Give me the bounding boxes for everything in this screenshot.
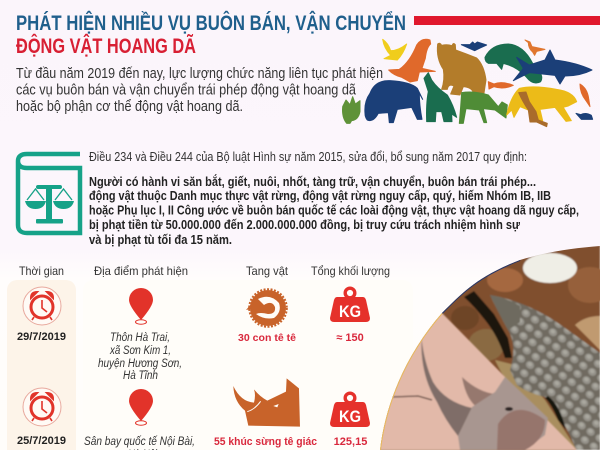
icon: weasel — [519, 92, 547, 127]
icon: turtle — [576, 113, 593, 119]
icon: alarm clock — [23, 287, 61, 325]
intro text — [16, 66, 383, 115]
icon: wolf — [424, 73, 457, 122]
animal silhouettes — [343, 39, 593, 127]
legal penalty text — [89, 174, 579, 247]
icon: bison — [365, 81, 423, 123]
icon: sea lion — [389, 39, 435, 82]
rhino photo — [380, 300, 577, 450]
title line 2: ĐỘNG VẬT HOANG DÃ — [16, 34, 196, 58]
legal penalty text: và bị phạt tù tối đa 15 năm. — [89, 232, 232, 247]
location: Thôn Hà Trai, — [110, 332, 170, 344]
intro text: hoặc bộ phận cơ thể động vật hoang dã. — [16, 99, 243, 115]
icon: leaping fish — [580, 84, 590, 107]
legal reference line: Điều 234 và Điều 244 của Bộ luật Hình sự năm 2015, sửa đổi, bổ sung năm 2017 quy định: — [89, 150, 527, 164]
seized goods: 30 con tê tê — [238, 332, 296, 344]
icon: map pin — [129, 389, 153, 425]
legal penalty text: bị phạt tiền từ 50.000.000 đến 2.000.000.000 đồng, bị truy cứu trách nhiệm hình sự — [89, 217, 520, 232]
intro text: các vụ buôn bán và vận chuyển trái phép động vật hoang dã — [16, 82, 357, 98]
red accent bar — [414, 16, 600, 25]
row 2 — [17, 378, 370, 450]
location — [98, 332, 182, 382]
panel: photo of pangolin and rhino — [380, 240, 600, 450]
intro text: Từ đầu năm 2019 đến nay, lực lượng chức năng liên tục phát hiện — [16, 66, 383, 82]
icon: KG weight: KG — [339, 302, 361, 321]
icon: bat — [461, 42, 487, 51]
location: Hà Tĩnh — [123, 370, 158, 382]
title — [16, 11, 406, 58]
icon: shark — [513, 50, 592, 84]
date: 29/7/2019 — [17, 331, 66, 343]
total weight: 125,15 — [334, 436, 367, 448]
icon: rhino head — [233, 378, 300, 427]
table headers: Tang vật — [246, 264, 289, 278]
location: huyện Hương Sơn, — [98, 358, 182, 370]
table headers: Thời gian — [19, 264, 64, 278]
icon: bear — [437, 43, 486, 95]
table headers — [19, 264, 390, 278]
icon: pangolin — [246, 289, 287, 327]
icon: map pin — [129, 288, 153, 324]
icon: deer — [459, 92, 507, 123]
photo edge: navy — [442, 260, 520, 313]
panel: details column — [83, 280, 413, 450]
total weight: ≈ 150 — [336, 332, 364, 344]
panel: legal notice — [18, 150, 579, 247]
icon: manatee — [485, 44, 542, 83]
panel: date column — [7, 280, 76, 450]
table headers: Địa điểm phát hiện — [94, 264, 188, 278]
icon: small fish — [488, 82, 513, 89]
title line 1: PHÁT HIỆN NHIỀU VỤ BUÔN BÁN, VẬN CHUYỂN — [16, 11, 406, 35]
icon: alarm clock — [23, 388, 61, 426]
pangolin photo — [380, 240, 600, 450]
icon: KG weight — [330, 288, 370, 322]
row 1 — [17, 287, 370, 382]
icon: yellow bird — [383, 39, 407, 60]
table headers: Tổng khối lượng — [311, 264, 390, 278]
icon: lioness — [507, 87, 577, 121]
icon: KG weight — [330, 393, 370, 427]
icon: wading bird — [525, 40, 545, 55]
location: xã Sơn Kim 1, — [109, 345, 171, 357]
icon: law book with scales — [18, 154, 80, 233]
seized goods: 55 khúc sừng tê giác — [214, 436, 317, 448]
date: 25/7/2019 — [17, 435, 66, 447]
photo edge: yellow — [380, 313, 442, 450]
icon: KG weight: KG — [339, 407, 361, 426]
icon: rooster — [343, 97, 360, 123]
location: Sân bay quốc tế Nội Bài, — [84, 436, 195, 448]
